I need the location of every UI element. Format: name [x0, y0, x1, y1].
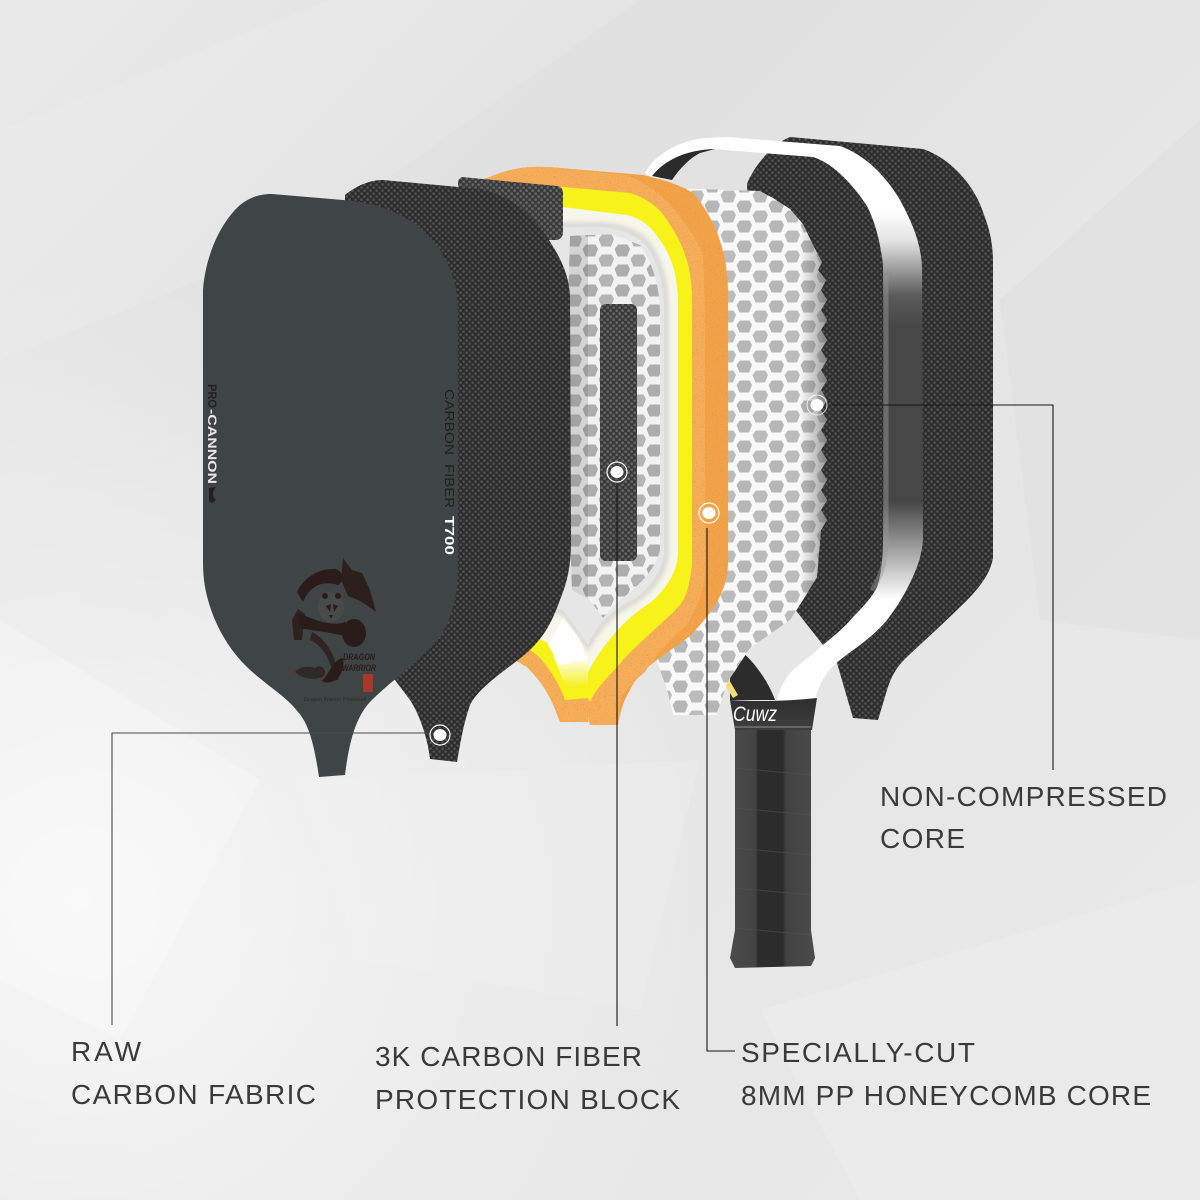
marker: raw carbon — [430, 725, 450, 745]
inner honeycomb through the ring — [568, 234, 660, 618]
marker: non-compressed core — [807, 395, 827, 415]
small carbon top tab — [458, 177, 563, 240]
leader: non-compressed core — [832, 405, 1053, 770]
grip — [730, 728, 815, 968]
collar line — [735, 726, 811, 728]
white inner band — [500, 207, 678, 680]
leader: raw carbon fabric — [112, 733, 430, 1025]
panda head — [318, 592, 344, 622]
panda shoulder — [342, 619, 366, 647]
frame inner bevel — [872, 275, 886, 590]
frame yellow strip — [722, 678, 738, 698]
marker: protection block — [607, 462, 627, 482]
foam speckle — [480, 167, 728, 725]
label: honeycomb core: 8MM PP HONEYCOMB CORE — [741, 1080, 1151, 1111]
carbon fiber T700 sheet — [345, 180, 571, 762]
hollow centre — [500, 227, 664, 645]
label: raw carbon fabric: CARBON FABRIC — [71, 1079, 316, 1110]
raw carbon fabric front sheet — [203, 194, 458, 777]
brand text: CARBON FIBER T700: CARBON — [442, 389, 457, 455]
cloud — [295, 666, 325, 679]
handle — [730, 698, 817, 968]
label: non-compressed core: CORE — [880, 823, 965, 854]
dragon warrior panda emblem — [292, 558, 376, 703]
brand text: CARBON FIBER T700: FIBER — [442, 464, 457, 508]
frame lower back band — [730, 653, 775, 700]
panda left arm — [292, 609, 305, 640]
hollow centre soft edge — [500, 224, 667, 648]
dragon arc — [297, 569, 342, 602]
collar — [730, 698, 817, 730]
red seal — [363, 674, 373, 692]
panda ears and eyes — [322, 593, 341, 619]
brand text: PRO-CANNON — [205, 384, 219, 503]
leader: honeycomb core — [707, 528, 735, 1051]
brand text: PRO-CANNON: -CANNON — [205, 409, 219, 484]
3K carbon fiber protection block — [600, 304, 637, 561]
foam face — [480, 167, 705, 725]
orange foam edge ring — [480, 167, 728, 725]
foam outer side — [480, 167, 728, 725]
dragon warrior wordmark — [342, 652, 376, 673]
dragon warrior wordmark: DRAGON — [343, 652, 375, 662]
frame back band — [652, 149, 715, 180]
panda arms — [298, 613, 356, 640]
yellow band — [500, 187, 692, 702]
brand text: CARBON FIBER T700 — [442, 389, 457, 555]
sword sweep — [310, 632, 338, 680]
brand text: CARBON FIBER T700: T700 — [442, 516, 457, 555]
label: honeycomb core: SPECIALLY-CUT — [741, 1037, 975, 1068]
leader: protection block — [616, 483, 618, 1026]
handle logo: Cuwz — [733, 703, 777, 726]
dragon head — [341, 558, 376, 612]
rear carbon fiber sheet — [747, 137, 993, 720]
dragon warrior wordmark: WARRIOR — [342, 663, 376, 673]
small dragon glyph — [209, 487, 216, 503]
8mm PP honeycomb core — [657, 188, 827, 715]
marker: honeycomb core — [699, 503, 719, 523]
frame outer band — [645, 137, 923, 700]
label: protection block: PROTECTION BLOCK — [375, 1084, 680, 1115]
bottom arc and small panda — [322, 658, 344, 683]
white fade into yellow — [553, 655, 588, 688]
label: non-compressed core: NON-COMPRESSED — [880, 781, 1167, 812]
bottom white highlight — [548, 618, 586, 665]
brand text: PRO-CANNON: PRO — [205, 384, 219, 408]
white core frame — [645, 137, 923, 700]
grip wraps — [735, 768, 811, 935]
sheet shape — [345, 180, 571, 762]
small caption: Dragon Warrior Pickleball — [304, 697, 366, 703]
callout lines — [112, 405, 1053, 1051]
label: raw carbon fabric: RAW — [71, 1036, 142, 1067]
label: protection block: 3K CARBON FIBER — [375, 1041, 642, 1072]
